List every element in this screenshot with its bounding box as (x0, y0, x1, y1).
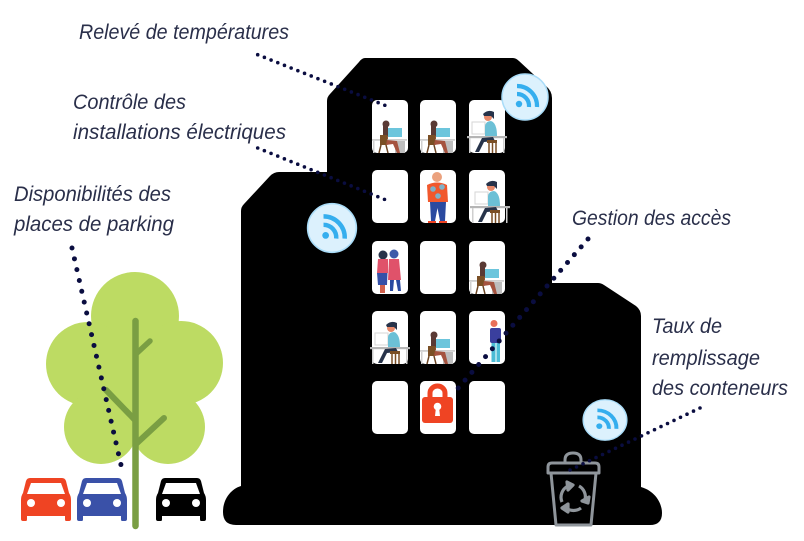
icon: wifi top (502, 74, 548, 120)
person: man in hawaiian shirt (427, 172, 448, 223)
car: red (21, 478, 71, 521)
label: taux de remplissage des conteneurs: Taux de (652, 315, 722, 338)
dotted leader: relevé de températures (258, 55, 391, 108)
tree (46, 272, 223, 526)
dotted leader: conteneurs (570, 408, 700, 470)
tree foliage (46, 272, 223, 464)
person: standing man (490, 320, 501, 362)
label: contrôle des installations électriques (73, 91, 286, 144)
dotted leader: gestion des accès (453, 239, 588, 394)
label: taux de remplissage des conteneurs: des conteneurs (652, 377, 788, 400)
icon: wifi bottom (583, 400, 627, 440)
label: disponibilités des places de parking (13, 183, 174, 236)
windows (372, 100, 505, 434)
recycling arrows (561, 482, 589, 512)
dotted leader: contrôle des installations (258, 148, 391, 202)
label: taux de remplissage des conteneurs (652, 315, 788, 400)
label: gestion des accès: Gestion des accès (572, 207, 731, 230)
icon: recycling bin (548, 453, 599, 525)
label: disponibilités des places de parking: places de parking (13, 213, 174, 236)
car: blue (77, 478, 127, 521)
label: relevé de températures: Relevé de températures (79, 21, 289, 44)
car: black (156, 478, 206, 521)
building (223, 58, 662, 525)
tree trunk (106, 321, 164, 526)
label: contrôle des installations électriques: Contrôle des (73, 91, 186, 114)
label: contrôle des installations électriques: installations électriques (73, 121, 286, 144)
persons: two women talking (377, 250, 401, 293)
dotted leader: places de parking (72, 248, 121, 465)
icon: wifi left (308, 204, 356, 252)
label: disponibilités des places de parking: Disponibilités des (14, 183, 171, 206)
office workers (370, 111, 510, 364)
label: taux de remplissage des conteneurs: remplissage (652, 347, 760, 370)
icon: red padlock (422, 386, 453, 423)
